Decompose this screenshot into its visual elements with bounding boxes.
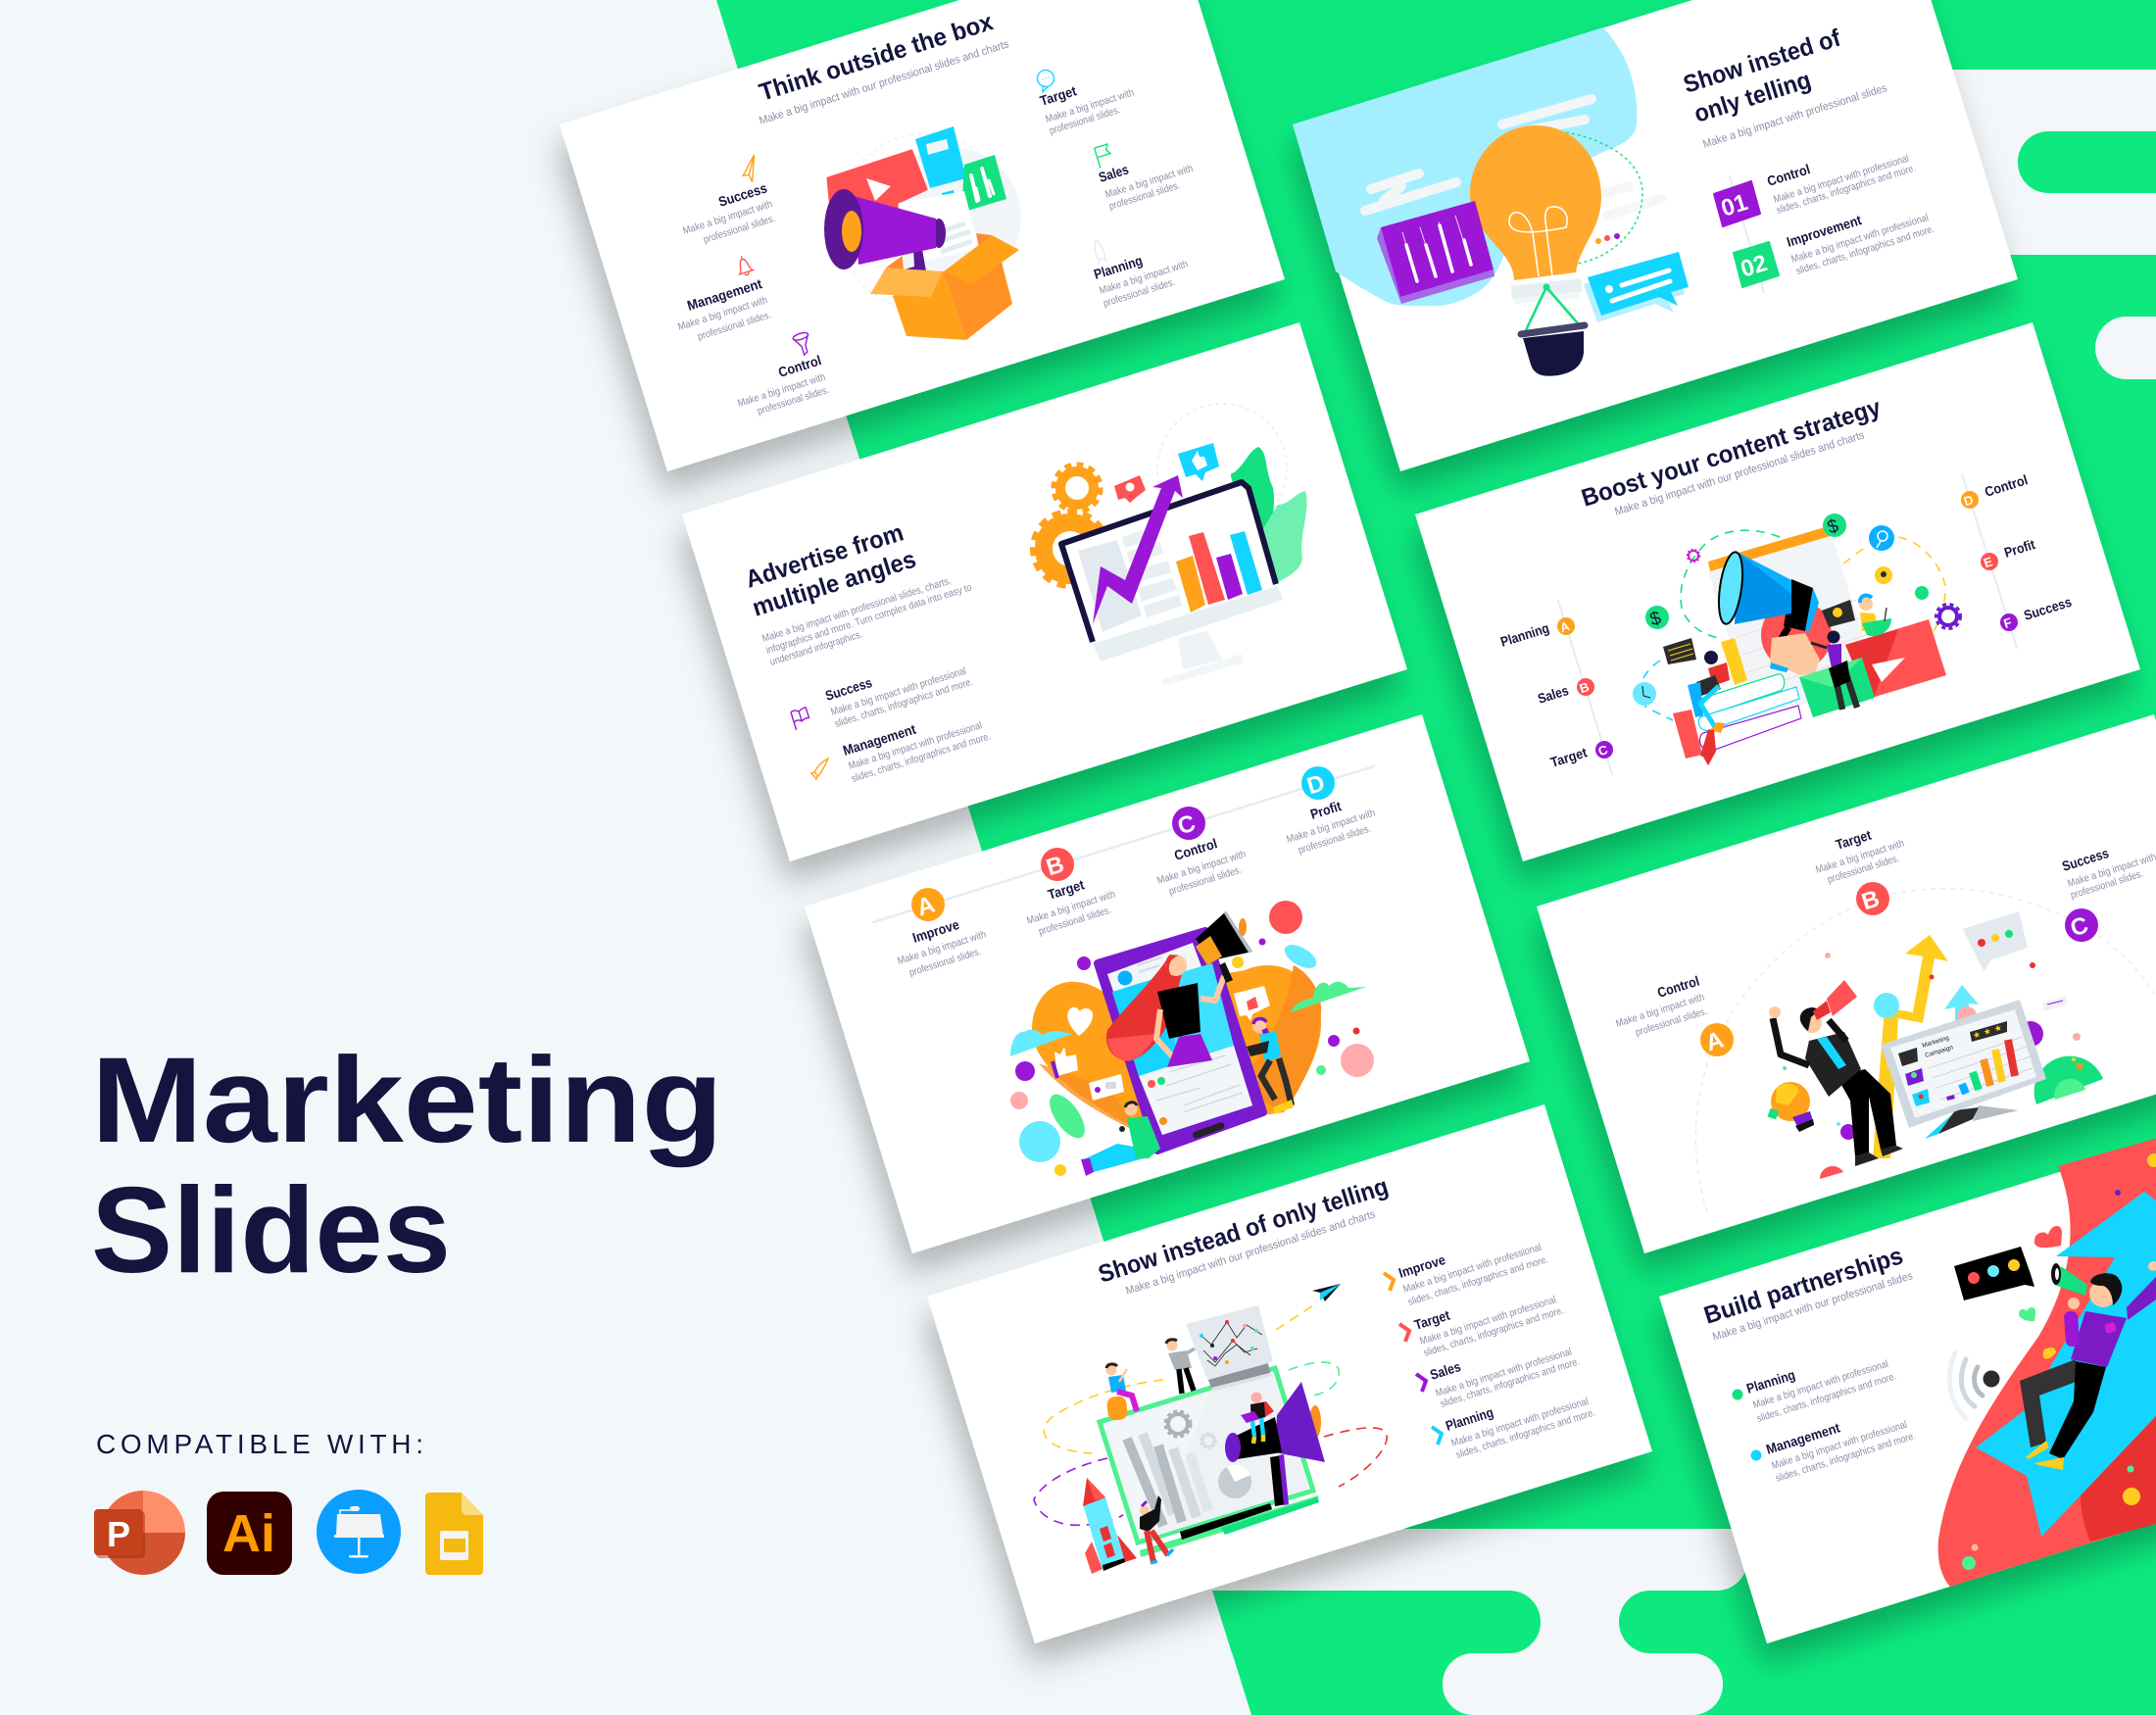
- icon: Keynote: [317, 1490, 401, 1574]
- item: Target: [1035, 68, 1136, 137]
- item: Sales: Make a big impact with: [1103, 163, 1195, 201]
- item 01 Control: [1714, 153, 1917, 226]
- icon: Illustrator: [207, 1492, 292, 1575]
- icon: PowerPoint: P: [107, 1514, 130, 1554]
- item: Target: Make a big impact with professional: [1418, 1294, 1557, 1348]
- step B Target: Target: [1834, 827, 1874, 853]
- icon: equalizer panel: [1377, 201, 1494, 304]
- panel: Advertise from multiple angles: [682, 322, 1407, 861]
- illustration: board, megaphone, rocket and people: [1034, 1284, 1387, 1574]
- left timeline: Planning: [1498, 619, 1551, 650]
- illustration: light bulb balloon: [1470, 125, 1601, 376]
- right timeline: Profit: [2002, 536, 2037, 561]
- step C Control: Make a big impact with: [1155, 848, 1248, 887]
- right timeline: D: [1962, 492, 1975, 509]
- step A Control: professional slides.: [1634, 1005, 1708, 1039]
- step B Target: professional slides.: [1037, 905, 1112, 938]
- item: Management: Management: [685, 275, 764, 314]
- step B Target: professional slides.: [1826, 853, 1900, 886]
- subtitle: Make a big impact with our professional slides and charts: [1613, 429, 1866, 518]
- heading: multiple angles: [749, 546, 919, 622]
- item: Planning: Planning: [1444, 1404, 1495, 1434]
- slide card: [927, 1104, 1652, 1643]
- item: Planning: Make a big impact with: [1098, 258, 1190, 297]
- step B Target: B: [1858, 885, 1883, 915]
- item: Management: slides, charts, infographics and more.: [1774, 1430, 1917, 1485]
- item: Sales: Make a big impact with professional: [1434, 1346, 1573, 1399]
- left timeline: B: [1578, 679, 1591, 696]
- step C Success: professional slides.: [2069, 868, 2144, 902]
- item: Planning: Planning: [1744, 1366, 1797, 1396]
- clouds: [1365, 99, 1661, 216]
- left timeline: A: [1558, 618, 1572, 635]
- left timeline: Sales: [1536, 682, 1571, 707]
- item: Sales: [1095, 144, 1195, 213]
- right timeline: Control: [1983, 471, 2030, 500]
- left timeline: Target: [1548, 744, 1589, 770]
- compatible with heading: COMPATIBLE WITH:: [96, 1429, 423, 1459]
- item: Management: [676, 254, 772, 343]
- subtitle: Make a big impact with our professional slides and charts: [1124, 1208, 1377, 1298]
- item 01 Control: Control: [1765, 161, 1812, 189]
- icon: Illustrator: Ai: [222, 1504, 275, 1563]
- step A Improve: Make a big impact with: [896, 928, 988, 967]
- item: Sales: professional slides.: [1107, 179, 1182, 213]
- item: Control: [736, 331, 830, 417]
- item: Target: Target: [1412, 1307, 1452, 1333]
- step C Success: C: [2067, 911, 2091, 942]
- slide card: [805, 714, 1530, 1253]
- item 02 Improvement: 02: [1738, 250, 1771, 283]
- step B Target: Target: [1046, 876, 1086, 903]
- step B Target: Make a big impact with: [1814, 837, 1906, 876]
- light blue blob: [1293, 27, 1637, 306]
- illustration: megaphone in box: [824, 126, 1021, 340]
- item: Success: Make a big impact with: [681, 198, 774, 237]
- item 01 Control: Make a big impact with professional: [1772, 153, 1910, 206]
- main title: [91, 1033, 723, 1298]
- step B Target: [1025, 848, 1117, 938]
- slide card: [1537, 714, 2156, 1253]
- right timeline: Success: [2022, 594, 2074, 623]
- illustration: monitor with growth chart: [1033, 404, 1307, 686]
- illustration: presenter with monitor: ★★★: [1972, 1022, 2003, 1041]
- item: Planning: slides, charts, infographics and more.: [1755, 1370, 1897, 1425]
- step D Profit: D: [1303, 769, 1328, 800]
- item: Management: professional slides.: [696, 309, 772, 343]
- subtitle: Make a big impact with our professional slides: [1711, 1270, 1914, 1344]
- right timeline: E: [1982, 554, 1994, 570]
- item: Control: Make a big impact with: [736, 371, 827, 410]
- heading: Boost your content strategy: [1578, 394, 1885, 513]
- illustration: phone and heart: [1010, 901, 1374, 1176]
- left timeline: [1498, 601, 1613, 774]
- item: Planning: professional slides.: [1102, 276, 1176, 310]
- item: Planning: Planning: [1092, 252, 1145, 282]
- step C Control: C: [1174, 809, 1199, 840]
- intro text: understand infographics.: [768, 628, 863, 668]
- icon: PowerPoint: [94, 1491, 185, 1575]
- item: Planning: slides, charts, infographics and more.: [1454, 1406, 1596, 1461]
- item: Control: Control: [776, 352, 823, 380]
- item 02 Improvement: slides, charts, infographics and more.: [1794, 223, 1936, 277]
- main title: Marketing: [91, 1033, 723, 1168]
- step A Control: Make a big impact with: [1614, 991, 1706, 1030]
- heading: Think outside the box: [756, 8, 997, 107]
- icon: chat bubble: [1584, 252, 1689, 322]
- panel: Think outside the box: [560, 0, 1285, 471]
- item 01 Control: slides, charts, infographics and more.: [1775, 162, 1917, 217]
- step D Profit: [1285, 766, 1377, 857]
- slide card: [560, 0, 1285, 471]
- panel: Show insted of only telling: [1293, 0, 2018, 471]
- item: Success: Make a big impact with professional: [829, 665, 967, 718]
- illustration: megaphone on paper with team: $: [1647, 608, 1664, 630]
- item: Success: Success: [716, 179, 769, 210]
- left timeline: C: [1596, 742, 1610, 759]
- item: Success: [791, 665, 974, 730]
- step A Control: Control: [1655, 973, 1701, 1001]
- item: Management: [811, 719, 992, 785]
- item: Success: [681, 155, 776, 246]
- right timeline: [1961, 471, 2074, 648]
- item: Management: Make a big impact with: [676, 294, 769, 333]
- step C Control: [1155, 807, 1248, 898]
- heading: Show insted of: [1680, 24, 1844, 99]
- item: Planning: [1733, 1358, 1897, 1425]
- illustration: megaphone on paper with team: $: [1825, 515, 1841, 538]
- subtitle: Make a big impact with professional slides: [1701, 82, 1888, 151]
- slide card: [682, 322, 1407, 861]
- panel: Show instead of only telling: [927, 1104, 1652, 1643]
- item: Success: professional slides.: [702, 213, 776, 246]
- slide card: [1293, 0, 2018, 471]
- icon: sound waves: [1949, 1352, 1999, 1418]
- step C Success: Success: [2060, 845, 2111, 874]
- step B Target: [1814, 827, 1906, 915]
- item: Target: Make a big impact with: [1044, 86, 1136, 125]
- subtitle: Make a big impact with our professional slides and charts: [758, 38, 1010, 127]
- main title: Slides: [91, 1163, 451, 1298]
- item: Success: slides, charts, infographics and more.: [833, 676, 974, 730]
- item 02 Improvement: Improvement: [1785, 212, 1864, 250]
- illustration: presenter with monitor: Marketing: [1922, 1035, 1950, 1050]
- item: Planning: [1092, 239, 1190, 310]
- panel: Boost your content strategy: [1415, 322, 2140, 861]
- item: Management: Make a big impact with professional: [847, 719, 983, 772]
- intro text: Make a big impact with professional slides, charts,: [760, 575, 953, 645]
- step A Improve: A: [913, 891, 938, 921]
- item: Target: Target: [1038, 82, 1078, 109]
- step D Profit: Profit: [1308, 798, 1344, 822]
- step A Improve: Improve: [910, 916, 961, 946]
- step B Target: Make a big impact with: [1025, 888, 1117, 927]
- step D Profit: professional slides.: [1297, 823, 1372, 857]
- item: Improve: slides, charts, infographics and more.: [1406, 1253, 1549, 1308]
- item: Planning: Make a big impact with professional: [1751, 1358, 1889, 1411]
- heading: Advertise from: [742, 518, 906, 594]
- illustration: presenter with monitor: Campaign: [1925, 1044, 1954, 1059]
- right timeline: F: [2002, 614, 2014, 631]
- illustration: presenter with monitor: [1768, 911, 2103, 1179]
- item: Target: professional slides.: [1048, 104, 1122, 137]
- heading: [1680, 24, 1844, 128]
- step B Target: B: [1043, 851, 1067, 881]
- step C Control: professional slides.: [1167, 864, 1243, 898]
- panel: arc with A B C and presenter: [1537, 714, 2156, 1253]
- dashed circle: [1566, 132, 1642, 264]
- intro text: infographics and more. Turn complex data into easy to: [764, 581, 973, 657]
- item: Management: slides, charts, infographics and more.: [850, 730, 992, 785]
- step C Success: [2060, 845, 2156, 942]
- item: Improve: Make a big impact with professional: [1401, 1242, 1543, 1296]
- item: Success: Success: [823, 674, 874, 704]
- item: Sales: Sales: [1097, 161, 1131, 185]
- heading: Show instead of only telling: [1095, 1173, 1392, 1289]
- step C Control: Control: [1172, 835, 1219, 863]
- item 02 Improvement: [1734, 212, 1936, 287]
- panel: timeline A B C D with phone: [805, 714, 1530, 1253]
- item: Management: Management: [841, 721, 918, 759]
- item: Improve: Improve: [1396, 1251, 1447, 1281]
- step A Control: A: [1702, 1026, 1727, 1056]
- item: Control: professional slides.: [756, 384, 830, 417]
- item 02 Improvement: Make a big impact with professional: [1789, 212, 1930, 266]
- illustration: megaphone on paper with team: [1633, 514, 1960, 760]
- heading: only telling: [1690, 66, 1814, 128]
- item: Management: Management: [1764, 1419, 1842, 1457]
- icon: Google Slides: [425, 1493, 483, 1575]
- step A Improve: professional slides.: [907, 946, 982, 979]
- illustration: red wave, arrow and person with megaphone: [1938, 1104, 2156, 1587]
- slide card: [1659, 1104, 2156, 1643]
- dots: [1595, 233, 1620, 244]
- step A Improve: [896, 888, 988, 979]
- item: Target: slides, charts, infographics and more.: [1422, 1304, 1565, 1359]
- step D Profit: Make a big impact with: [1285, 807, 1377, 846]
- step A Control: [1614, 973, 1734, 1056]
- item: Sales: slides, charts, infographics and more.: [1439, 1355, 1581, 1410]
- item 01 Control: 01: [1718, 189, 1751, 222]
- item: Planning: Make a big impact with professional: [1449, 1396, 1590, 1449]
- slide card: [1415, 322, 2140, 861]
- item: Sales: Sales: [1428, 1358, 1463, 1383]
- heading: Build partnerships: [1700, 1242, 1906, 1330]
- item: Management: Make a big impact with professional: [1770, 1419, 1908, 1472]
- panel: Build partnerships: [1659, 1104, 2156, 1643]
